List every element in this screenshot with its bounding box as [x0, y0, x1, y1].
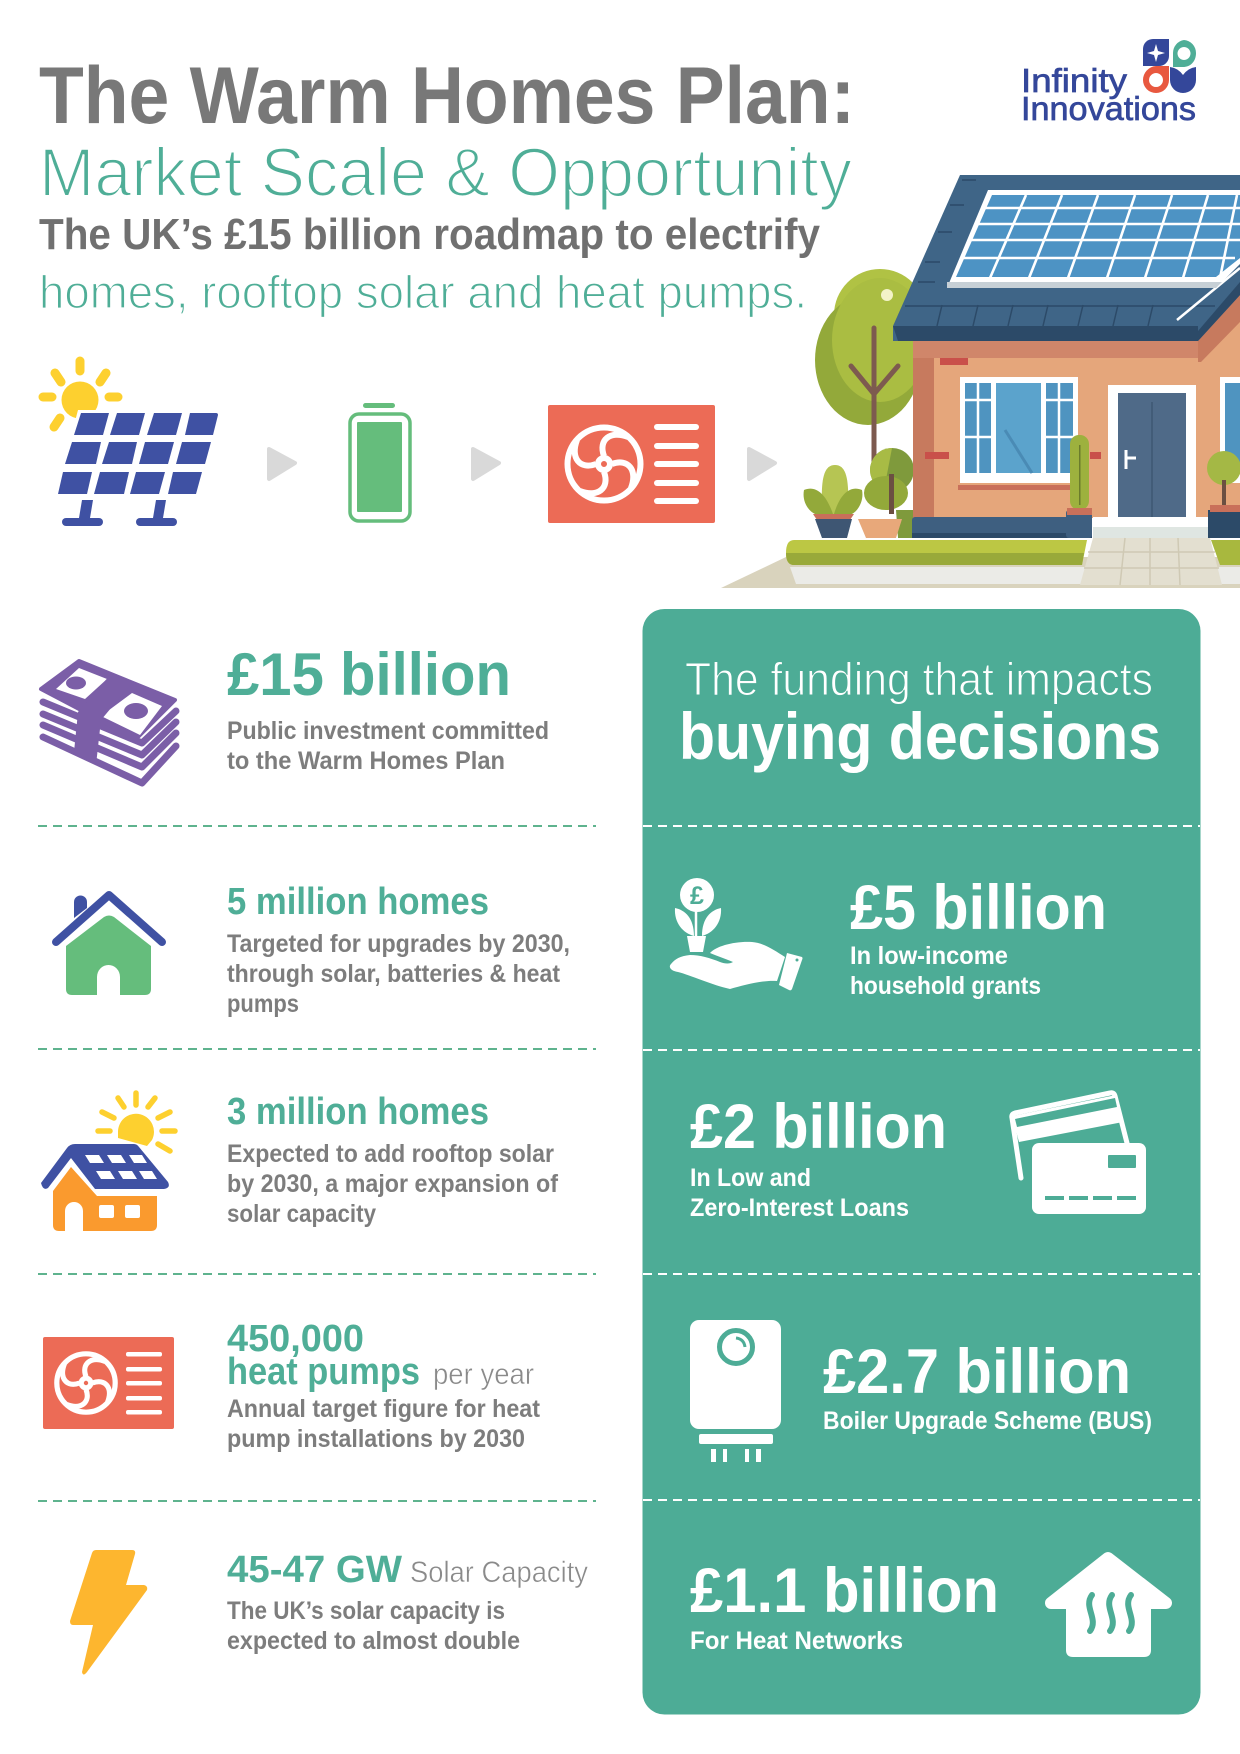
- arrow: [473, 449, 499, 479]
- description: [227, 930, 570, 1018]
- plinth and steps: [912, 510, 1240, 538]
- description: In low-income: [850, 942, 1008, 970]
- strapline bold: The UK’s £15 billion roadmap to electrify: [39, 210, 820, 259]
- description: In Low and: [690, 1164, 811, 1192]
- flow: solar panel icon: [43, 361, 220, 526]
- description: pump installations by 2030: [227, 1425, 525, 1453]
- description: Zero-Interest Loans: [690, 1194, 909, 1222]
- amount: £5 billion: [850, 873, 1107, 943]
- description: The UK’s solar capacity is: [227, 1597, 505, 1625]
- funding: £2.7 billion: [690, 1320, 1152, 1462]
- icon: lightning bolt: [70, 1550, 147, 1674]
- heading: 3 million homes: [227, 1091, 489, 1133]
- icon: solar home: [41, 1093, 175, 1231]
- stat: 450,000 heat pumps: heat pumps: [227, 1351, 420, 1393]
- logo: Innovations: [1021, 90, 1196, 127]
- description: Expected to add rooftop solar: [227, 1140, 554, 1168]
- logo wordmark: Infinity: [1021, 62, 1128, 99]
- description: expected to almost double: [227, 1627, 520, 1655]
- flow: heat pump icon: [548, 405, 715, 523]
- icon: hand with plant: [670, 878, 802, 990]
- description: [850, 942, 1041, 1000]
- door: [1108, 385, 1196, 518]
- right window: [1220, 377, 1240, 483]
- description: For Heat Networks: [690, 1627, 903, 1655]
- icon: house: [56, 895, 162, 995]
- heading: 450,000: [227, 1318, 364, 1360]
- window: [958, 377, 1078, 490]
- description: Annual target figure for heat: [227, 1395, 541, 1423]
- description: to the Warm Homes Plan: [227, 747, 505, 775]
- heading: £15 billion: [227, 641, 511, 708]
- arrow: [749, 449, 775, 479]
- house illustration: [721, 175, 1240, 588]
- icon: heat pump: [43, 1337, 174, 1429]
- stat: 3 million homes: [41, 1091, 559, 1231]
- description: [227, 717, 549, 775]
- panel: funding: [642, 609, 1200, 1714]
- icon: hand with plant: £: [690, 882, 704, 910]
- strapline light: homes, rooftop solar and heat pumps.: [39, 266, 807, 318]
- panel heading: [679, 653, 1161, 773]
- heading: 45-47 GW: [227, 1549, 402, 1591]
- unit label: per year: [433, 1358, 534, 1391]
- description: [227, 1140, 559, 1228]
- stat: 45-47 GW: [70, 1549, 588, 1674]
- stat: 450,000 heat pumps: [43, 1318, 541, 1453]
- logo: [1021, 39, 1196, 127]
- description: [227, 1395, 541, 1453]
- description: solar capacity: [227, 1200, 376, 1228]
- cactus: [1067, 435, 1092, 515]
- description: Boiler Upgrade Scheme (BUS): [823, 1407, 1152, 1435]
- icon: credit cards: [1012, 1093, 1146, 1214]
- funding: £1.1 billion: [690, 1556, 1166, 1657]
- panel heading: buying decisions: [679, 699, 1161, 773]
- amount: £2.7 billion: [823, 1337, 1131, 1407]
- description: through solar, batteries & heat: [227, 960, 561, 988]
- icon: boiler: [690, 1320, 781, 1462]
- title: The Warm Homes Plan:: [39, 51, 855, 141]
- stat: £15 billion: [41, 641, 549, 783]
- stat: 5 million homes: [56, 881, 570, 1018]
- unit label: Solar Capacity: [410, 1556, 588, 1589]
- subtitle: Market Scale & Opportunity: [39, 134, 852, 211]
- left column stats: [38, 641, 596, 1674]
- roof: [893, 175, 1240, 341]
- description: pumps: [227, 990, 299, 1018]
- wall: [913, 341, 1198, 518]
- shrub and planter: [858, 448, 914, 538]
- paving: [1080, 538, 1222, 585]
- heading: 5 million homes: [227, 881, 489, 923]
- ground: [721, 557, 1240, 588]
- flow: battery icon: [350, 403, 410, 521]
- roof solar array: [947, 190, 1240, 288]
- funding: £2 billion: [690, 1092, 1146, 1222]
- description: by 2030, a major expansion of: [227, 1170, 559, 1198]
- description: Targeted for upgrades by 2030,: [227, 930, 570, 958]
- tree: [815, 269, 928, 462]
- potted plant: [804, 465, 862, 538]
- amount: £2 billion: [690, 1092, 947, 1162]
- arrow: [269, 449, 295, 479]
- description: household grants: [850, 972, 1041, 1000]
- lawn: [786, 540, 1240, 565]
- funding: £5 billion: [670, 873, 1107, 1000]
- logo mark: [1143, 39, 1196, 93]
- icon: banknote stack: [41, 661, 176, 783]
- description: [690, 1164, 909, 1222]
- icon: heated home: [1051, 1558, 1166, 1657]
- description: Public investment committed: [227, 717, 549, 745]
- description: [227, 1597, 520, 1655]
- panel heading: The funding that impacts: [685, 653, 1153, 705]
- amount: £1.1 billion: [690, 1556, 999, 1626]
- topiary: [1207, 451, 1240, 512]
- header titles: [39, 51, 855, 318]
